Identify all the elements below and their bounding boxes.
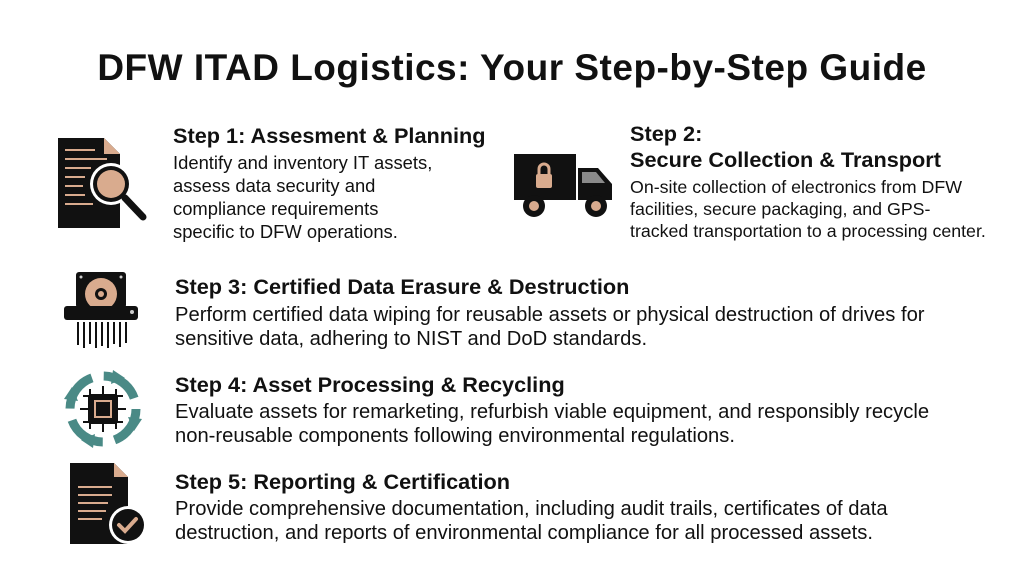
step 4 text <box>175 372 929 447</box>
step 5 text: Provide comprehensive documentation, including audit trails, certificates of data <box>175 498 888 520</box>
title: DFW ITAD Logistics: Your Step-by-Step Guide <box>97 47 927 88</box>
step 2 text: Step 2: <box>630 121 702 146</box>
step 1 text <box>173 123 486 242</box>
step 5 text: Step 5: Reporting & Certification <box>175 469 510 494</box>
step 3 text <box>175 274 925 350</box>
step 2 text: tracked transportation to a processing center. <box>630 221 986 241</box>
icon: drive shredder <box>64 272 138 348</box>
step 5 text: destruction, and reports of environmental compliance for all processed assets. <box>175 522 873 544</box>
step 2 text <box>630 121 986 241</box>
step 3 text: sensitive data, adhering to NIST and DoD standards. <box>175 328 647 350</box>
step 5 text <box>175 469 888 544</box>
step 1 text: Step 1: Assesment & Planning <box>173 123 486 148</box>
icon: recycling chip <box>64 370 142 448</box>
step 1 text: Identify and inventory IT assets, <box>173 152 432 173</box>
step 3 text: Step 3: Certified Data Erasure & Destruction <box>175 274 629 299</box>
step 2 text: Secure Collection & Transport <box>630 147 941 172</box>
step 2 text: facilities, secure packaging, and GPS- <box>630 199 930 219</box>
step 4 text: non-reusable components following environmental regulations. <box>175 425 735 447</box>
step 2 text: On-site collection of electronics from DFW <box>630 177 962 197</box>
step 3 text: Perform certified data wiping for reusable assets or physical destruction of drives for <box>175 304 925 326</box>
icon: document with checkmark <box>70 463 144 544</box>
step 4 text: Evaluate assets for remarketing, refurbish viable equipment, and responsibly recycle <box>175 401 929 423</box>
step 4 text: Step 4: Asset Processing & Recycling <box>175 372 565 397</box>
icon: document with magnifier <box>58 138 146 228</box>
step 1 text: assess data security and <box>173 175 375 196</box>
icon: truck with lock <box>514 154 612 217</box>
step 1 text: compliance requirements <box>173 198 378 219</box>
step 1 text: specific to DFW operations. <box>173 221 398 242</box>
